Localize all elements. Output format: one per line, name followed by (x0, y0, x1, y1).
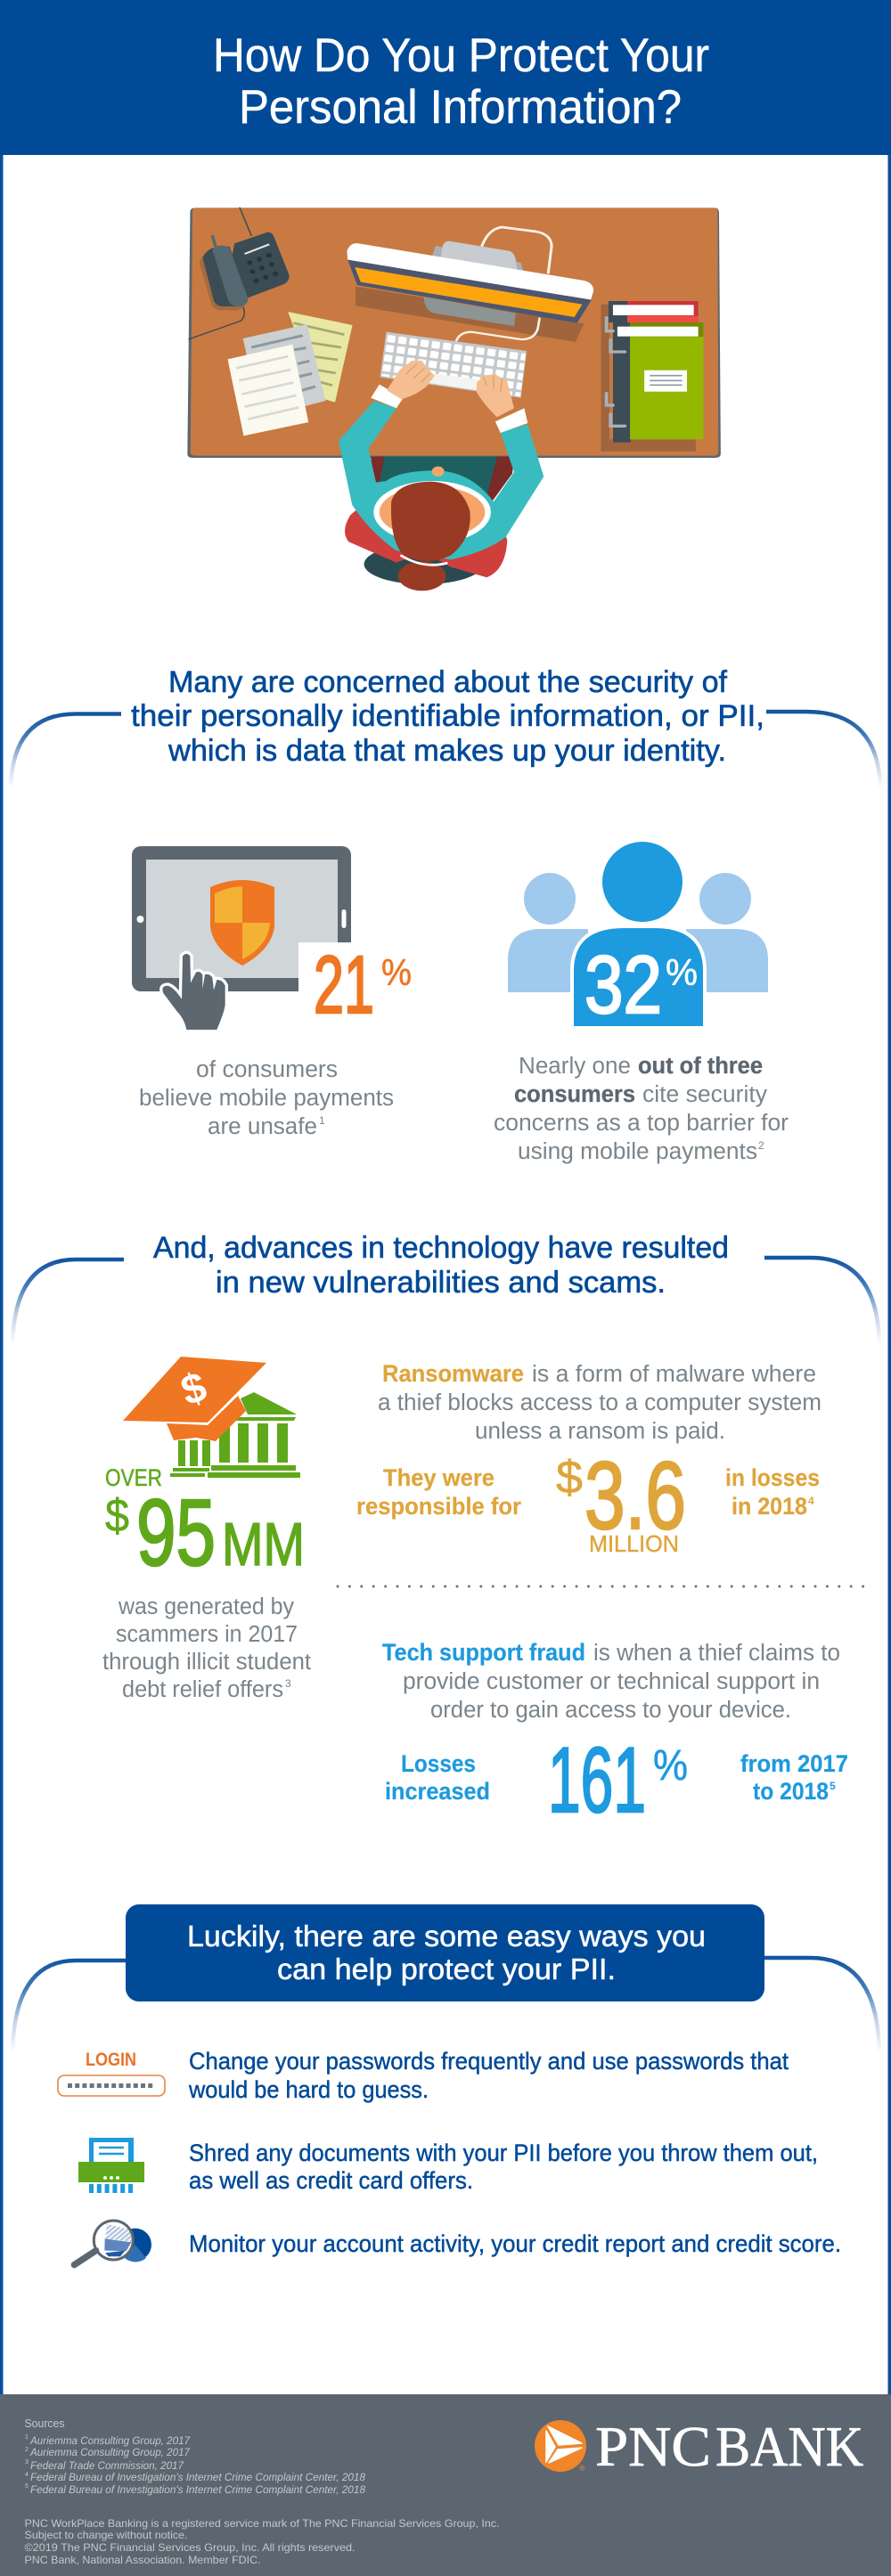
telephone (188, 208, 290, 339)
section heading: concerns: Many are concerned about the security of (168, 665, 728, 699)
text: shred tip (189, 2140, 818, 2194)
text: one out of three: cite security (642, 1082, 767, 1107)
text: ransomware definition: unless a ransom is paid. (475, 1419, 725, 1444)
papers (227, 312, 353, 436)
text: monitor tip: Monitor your account activity, your credit report and credit score. (189, 2230, 841, 2257)
text: scam description: was generated by (118, 1594, 294, 1619)
sources: Sources (25, 2417, 65, 2430)
heading box: easy ways (126, 1904, 764, 2001)
text: they were responsible for: They were (383, 1464, 495, 1491)
section heading: vulnerabilities: in new vulnerabilities and scams. (216, 1266, 666, 1300)
icon: shredder (78, 2138, 144, 2193)
text: shred tip: as well as credit card offers. (189, 2167, 473, 2194)
text: one out of three: out of three (638, 1054, 763, 1079)
bracket: tips section (12, 1958, 879, 2053)
stat: 161%: % (653, 1742, 688, 1789)
stat: 32%: % (666, 951, 698, 993)
text: one out of three (494, 1054, 789, 1164)
text: from 2017 to 2018: 5 (830, 1780, 836, 1792)
sources: Federal Bureau of Investigation's Internet Crime Complaint Center, 2018 (30, 2483, 365, 2496)
logo: PNC Bank: PNC (595, 2416, 711, 2478)
legal text: ©2019 The PNC Financial Services Group, Inc. All rights reserved. (25, 2541, 355, 2554)
text: passwords tip: Change your passwords frequently and use passwords that (189, 2048, 789, 2075)
stat: 21%: 21 (314, 940, 374, 1031)
logo: PNC Bank (535, 2416, 863, 2478)
tip: shred documents (78, 2138, 818, 2194)
text: tech support fraud definition (382, 1639, 840, 1723)
stat: $3.6 million: $ (556, 1452, 583, 1504)
text: scam description: 3 (285, 1677, 291, 1690)
legal text: PNC Bank, National Association. Member FDIC. (25, 2554, 260, 2566)
stat: over $95MM: OVER (105, 1464, 162, 1491)
text: from 2017 to 2018: from 2017 (740, 1750, 848, 1777)
text: of consumers: of consumers (196, 1057, 338, 1082)
text: scam description: through illicit student (102, 1650, 311, 1675)
keyboard (380, 332, 527, 398)
bracket: concerns section (11, 712, 880, 788)
icon: login field: LOGIN (86, 2050, 136, 2070)
text: of consumers (139, 1057, 394, 1139)
sources: 4 (25, 2472, 29, 2478)
text: from 2017 to 2018: to 2018 (753, 1778, 829, 1805)
section heading: concerns (131, 665, 764, 768)
header banner (0, 0, 891, 155)
icon: three people (508, 842, 768, 1026)
bracket: vulnerabilities section (12, 1258, 879, 1345)
stat: over $95MM (105, 1464, 305, 1586)
text: losses increased (385, 1750, 490, 1805)
stat: over $95MM: 95 (136, 1480, 216, 1586)
sources: Auriemma Consulting Group, 2017 (29, 2434, 191, 2447)
icon: magnifier over pie chart (74, 2221, 151, 2265)
text: of consumers: believe mobile payments (139, 1086, 394, 1111)
books and binder (601, 301, 703, 452)
tip: monitor accounts (74, 2221, 841, 2265)
sources: 3 (25, 2459, 29, 2466)
legal text (25, 2517, 499, 2566)
text: passwords tip (188, 2048, 789, 2103)
text: they were responsible for (356, 1464, 521, 1520)
text: losses increased: increased (385, 1778, 490, 1805)
text: they were responsible for: responsible for (356, 1493, 521, 1520)
legal text: Subject to change without notice. (25, 2529, 187, 2541)
sources (25, 2417, 365, 2496)
panel: student debt scams (102, 1357, 311, 1702)
text: scam description (102, 1594, 311, 1702)
text: in losses in 2018: 4 (808, 1495, 814, 1507)
stat: $3.6 million (556, 1441, 686, 1557)
text: one out of three: Nearly one (519, 1054, 631, 1079)
panel: 21 percent statistic (132, 846, 423, 1139)
text: tech support fraud definition: Tech support fraud (382, 1639, 585, 1666)
heading box: easy ways: Luckily, there are some easy ways you (187, 1920, 706, 1952)
text: scam description: scammers in 2017 (116, 1622, 298, 1647)
text: one out of three: concerns as a top barrier for (494, 1111, 789, 1136)
stat: 32%: 32 (584, 940, 662, 1031)
logo: PNC Bank: BANK (715, 2416, 863, 2478)
text: scam description: debt relief offers (122, 1677, 283, 1702)
text: tech support fraud definition: order to gain access to your device. (430, 1698, 791, 1723)
section heading: vulnerabilities: And, advances in technology have resulted (153, 1231, 729, 1265)
stat: 21%: % (381, 951, 412, 993)
sources: 2 (25, 2447, 29, 2453)
monitor (347, 227, 593, 342)
title: How Do You Protect Your (213, 29, 709, 82)
legal text: PNC WorkPlace Banking is a registered service mark of The PNC Financial Services Group, Inc. (25, 2517, 499, 2530)
text: one out of three: using mobile payments (518, 1139, 757, 1164)
chair (345, 457, 514, 584)
footer (0, 2394, 891, 2576)
logo: PNC Bank: ® (579, 2464, 585, 2473)
sources: 1 (25, 2434, 29, 2441)
text: ransomware definition: Ransomware (382, 1360, 524, 1387)
heading box: easy ways: can help protect your PII. (277, 1952, 616, 1985)
illustration: person at desk (187, 208, 721, 591)
sources: 5 (25, 2483, 29, 2490)
text: of consumers: are unsafe (208, 1114, 317, 1139)
text: one out of three: consumers (514, 1082, 635, 1107)
text: ransomware definition: a thief blocks access to a computer system (378, 1390, 822, 1415)
sources: Federal Trade Commission, 2017 (30, 2459, 184, 2472)
section heading: concerns: their personally identifiable information, or PII, (131, 699, 764, 733)
stat: 161%: 161 (548, 1729, 646, 1832)
stat: over $95MM: MM (222, 1511, 305, 1578)
text: tech support fraud definition: is when a thief claims to (593, 1641, 840, 1666)
person (339, 361, 544, 591)
text: in losses in 2018 (725, 1464, 820, 1520)
desk (187, 208, 721, 458)
tip: change passwords (58, 2048, 789, 2103)
icon: tablet with shield (132, 846, 423, 1030)
section heading: concerns: which is data that makes up your identity. (168, 734, 726, 768)
text: of consumers: 1 (319, 1114, 325, 1127)
section heading: vulnerabilities (153, 1231, 729, 1300)
text: passwords tip: would be hard to guess. (188, 2076, 429, 2103)
text: in losses in 2018: in losses (725, 1464, 820, 1491)
stat: $3.6 million: MILLION (589, 1530, 679, 1557)
text: from 2017 to 2018 (740, 1750, 848, 1805)
panel: 32 percent statistic (494, 842, 789, 1164)
icon: bank with graduation cap: $ (176, 1362, 212, 1414)
title (213, 29, 709, 134)
icon: bank with graduation cap (123, 1357, 300, 1478)
stat: over $95MM: $ (105, 1490, 129, 1542)
icon: login field (58, 2050, 165, 2096)
panel: ransomware (356, 1360, 822, 1557)
stat: $3.6 million: 3.6 (584, 1441, 686, 1549)
sources: Auriemma Consulting Group, 2017 (29, 2446, 191, 2458)
text: ransomware definition: is a form of malware where (532, 1362, 816, 1387)
text: losses increased: Losses (401, 1750, 476, 1777)
text: tech support fraud definition: provide customer or technical support in (403, 1669, 820, 1694)
text: in losses in 2018: in 2018 (732, 1493, 807, 1520)
text: one out of three: 2 (758, 1139, 764, 1152)
text: ransomware definition (378, 1360, 822, 1444)
panel: tech support fraud (382, 1639, 848, 1832)
sources: Federal Bureau of Investigation's Internet Crime Complaint Center, 2018 (30, 2471, 365, 2483)
text: shred tip: Shred any documents with your PII before you throw them out, (189, 2140, 818, 2166)
title: Personal Information? (239, 81, 682, 134)
